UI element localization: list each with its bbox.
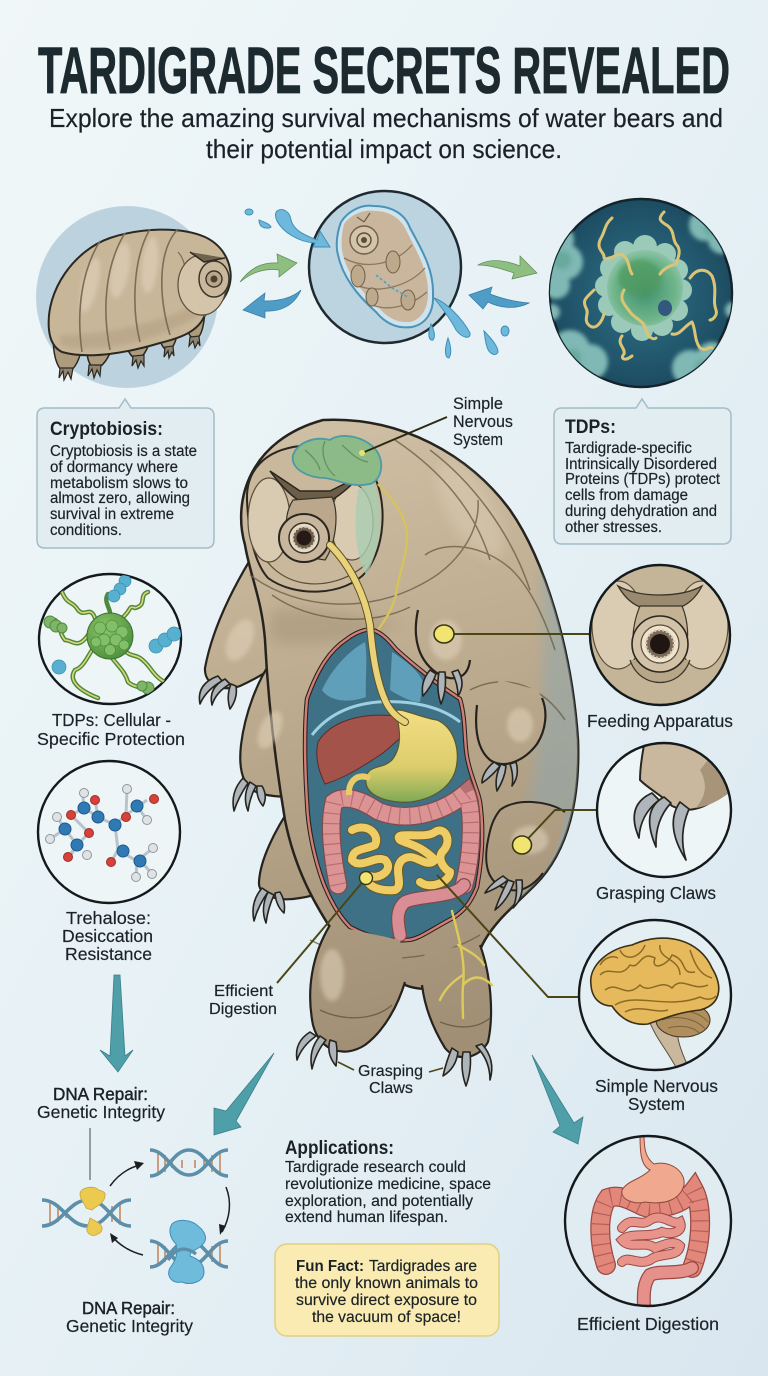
- label: efficient digestion: [209, 983, 277, 1018]
- label: feeding apparatus: Feeding Apparatus: [587, 711, 733, 731]
- label: simple nervous system: Nervous: [453, 412, 513, 431]
- panel: digestion circle: [565, 1134, 731, 1310]
- callout: cryptobiosis: Cryptobiosis is a state: [50, 443, 197, 460]
- lungs: [322, 642, 366, 701]
- head face: [247, 446, 383, 592]
- pointer: efficient digestion: [277, 872, 372, 983]
- main tardigrade illustration: [199, 420, 582, 1086]
- icon: water drops leaving: [429, 298, 509, 358]
- callout: TDPs: Tardigrade-specific: [565, 440, 692, 457]
- label: efficient digestion right: Efficient Digestion: [577, 1314, 719, 1334]
- callout: TDPs: Intrinsically Disordered: [565, 456, 717, 473]
- left legs: [205, 560, 340, 899]
- callout: TDPs: TDPs:: [565, 417, 616, 438]
- panel: desiccated tardigrade circle: [309, 191, 461, 343]
- arrow: green to TDP: [478, 256, 537, 279]
- panel: active tardigrade circle: [36, 206, 231, 388]
- callout: cryptobiosis: survival in extreme: [50, 506, 174, 523]
- heading: DNA repair top: [37, 1084, 165, 1122]
- esophagus: [330, 545, 405, 722]
- right arm: [416, 600, 474, 678]
- colon: [331, 793, 471, 935]
- dna left: [42, 1200, 131, 1226]
- panel: TDP cellular protection icon: [39, 574, 181, 704]
- right lower leg: [486, 802, 565, 890]
- bottom legs: [310, 925, 491, 1057]
- label: trehalose: Trehalose:: [66, 908, 151, 928]
- label: TDPs cellular protection: TDPs: Cellular -: [52, 710, 171, 730]
- callout: TDPs: cells from damage: [565, 487, 688, 504]
- arrow: blue from TDP: [469, 287, 529, 309]
- label: efficient digestion: Efficient: [214, 983, 274, 1000]
- pointer: feeding apparatus: [434, 625, 592, 643]
- heading: DNA repair top: DNA Repair:: [53, 1084, 148, 1104]
- label: simple nervous system: Simple: [453, 394, 503, 413]
- label: simple nervous system: System: [453, 430, 503, 449]
- right legs: [416, 600, 565, 890]
- label: TDPs cellular protection: [37, 710, 185, 749]
- callout: cryptobiosis: almost zero, allowing: [50, 490, 190, 507]
- callout: TDPs: Proteins (TDPs) protect: [565, 471, 721, 488]
- panel: brain circle: [579, 920, 731, 1075]
- label: grasping claws: [338, 1062, 443, 1097]
- callout: cryptobiosis: metabolism slows to: [50, 475, 188, 492]
- heading: DNA repair bottom: Genetic Integrity: [66, 1316, 193, 1336]
- leg highlights: [220, 615, 548, 1001]
- text block: applications: exploration, and potentially: [285, 1193, 473, 1210]
- panel: trehalose molecule icon: [38, 761, 180, 903]
- callout: TDPs: other stresses.: [565, 519, 662, 536]
- callout: fun fact: Tardigrades are: [369, 1258, 477, 1275]
- body folds: [250, 440, 565, 958]
- heading: DNA repair bottom: [66, 1298, 193, 1336]
- callout: TDPs: [554, 399, 731, 544]
- organ cavity: [305, 545, 482, 940]
- right middle leg: [476, 680, 545, 764]
- body shading: [270, 451, 582, 910]
- subtitle: [49, 103, 723, 164]
- callout: cryptobiosis: conditions.: [50, 522, 122, 539]
- pointer: grasping claws: [512, 810, 598, 854]
- label: trehalose: Resistance: [65, 944, 152, 964]
- label line: nervous system: [359, 417, 447, 456]
- label: simple nervous system right: Simple Nervous: [595, 1076, 718, 1096]
- callout: fun fact: [275, 1244, 499, 1336]
- label: TDPs cellular protection: Specific Protection: [37, 729, 185, 749]
- enzyme yellow: [80, 1187, 105, 1235]
- lower nerve: [440, 911, 492, 1018]
- claws: [199, 670, 522, 1086]
- label: efficient digestion: Digestion: [209, 1001, 277, 1018]
- dna top: [150, 1150, 228, 1176]
- label: simple nervous system right: System: [628, 1094, 685, 1114]
- callout: fun fact: the vacuum of space!: [312, 1309, 461, 1326]
- callout: cryptobiosis: [37, 399, 214, 548]
- callout: TDPs: during dehydration and: [565, 503, 717, 520]
- subtitle: their potential impact on science.: [206, 134, 562, 164]
- heading: DNA repair bottom: DNA Repair:: [82, 1298, 175, 1318]
- icon: water drops entering: [245, 209, 330, 247]
- pointer: nervous system circle: [437, 875, 580, 997]
- panel: grasping claws circle: [597, 740, 735, 877]
- label: grasping claws: Grasping: [358, 1063, 423, 1080]
- label: simple nervous system right: [595, 1076, 718, 1114]
- dna bottom: [150, 1241, 228, 1267]
- torso: [241, 420, 578, 989]
- brain in head: [293, 436, 407, 630]
- callout: fun fact: survive direct exposure to: [296, 1292, 477, 1309]
- callout: fun fact: the only known animals to: [295, 1275, 478, 1292]
- stomach: [366, 710, 457, 802]
- heading: DNA repair top: Genetic Integrity: [37, 1102, 165, 1122]
- callout: cryptobiosis: Cryptobiosis:: [50, 419, 163, 440]
- enzyme blue: [169, 1220, 205, 1284]
- cycle arrows: [110, 1165, 229, 1255]
- label: simple nervous system: [453, 394, 513, 449]
- panel: feeding apparatus circle: [590, 565, 730, 705]
- text block: applications: [285, 1138, 491, 1226]
- arrow: dry to active: [243, 290, 301, 318]
- small intestine: [352, 828, 450, 890]
- callout: fun fact: Fun Fact:: [296, 1258, 364, 1275]
- label: grasping claws right: Grasping Claws: [596, 883, 716, 903]
- arrow: active to dry: [240, 254, 297, 282]
- text block: applications: Applications:: [285, 1138, 394, 1159]
- label: grasping claws: Claws: [369, 1080, 413, 1097]
- diagram: DNA repair cycle: [42, 1150, 229, 1284]
- callout: cryptobiosis: of dormancy where: [50, 459, 178, 476]
- arrow: body to DNA repair: [214, 1053, 274, 1135]
- arrow: down to DNA repair: [100, 975, 133, 1072]
- label: trehalose: [62, 908, 153, 964]
- panel: TDP cell circle: [548, 198, 734, 388]
- label: trehalose: Desiccation: [62, 926, 153, 946]
- subtitle: Explore the amazing survival mechanisms of water bears and: [49, 103, 723, 133]
- liver: [317, 715, 421, 784]
- text block: applications: Tardigrade research could: [285, 1159, 466, 1176]
- arrow: body to digestion: [532, 1055, 583, 1144]
- text block: applications: extend human lifespan.: [285, 1209, 448, 1226]
- text block: applications: revolutionize medicine, space: [285, 1176, 491, 1193]
